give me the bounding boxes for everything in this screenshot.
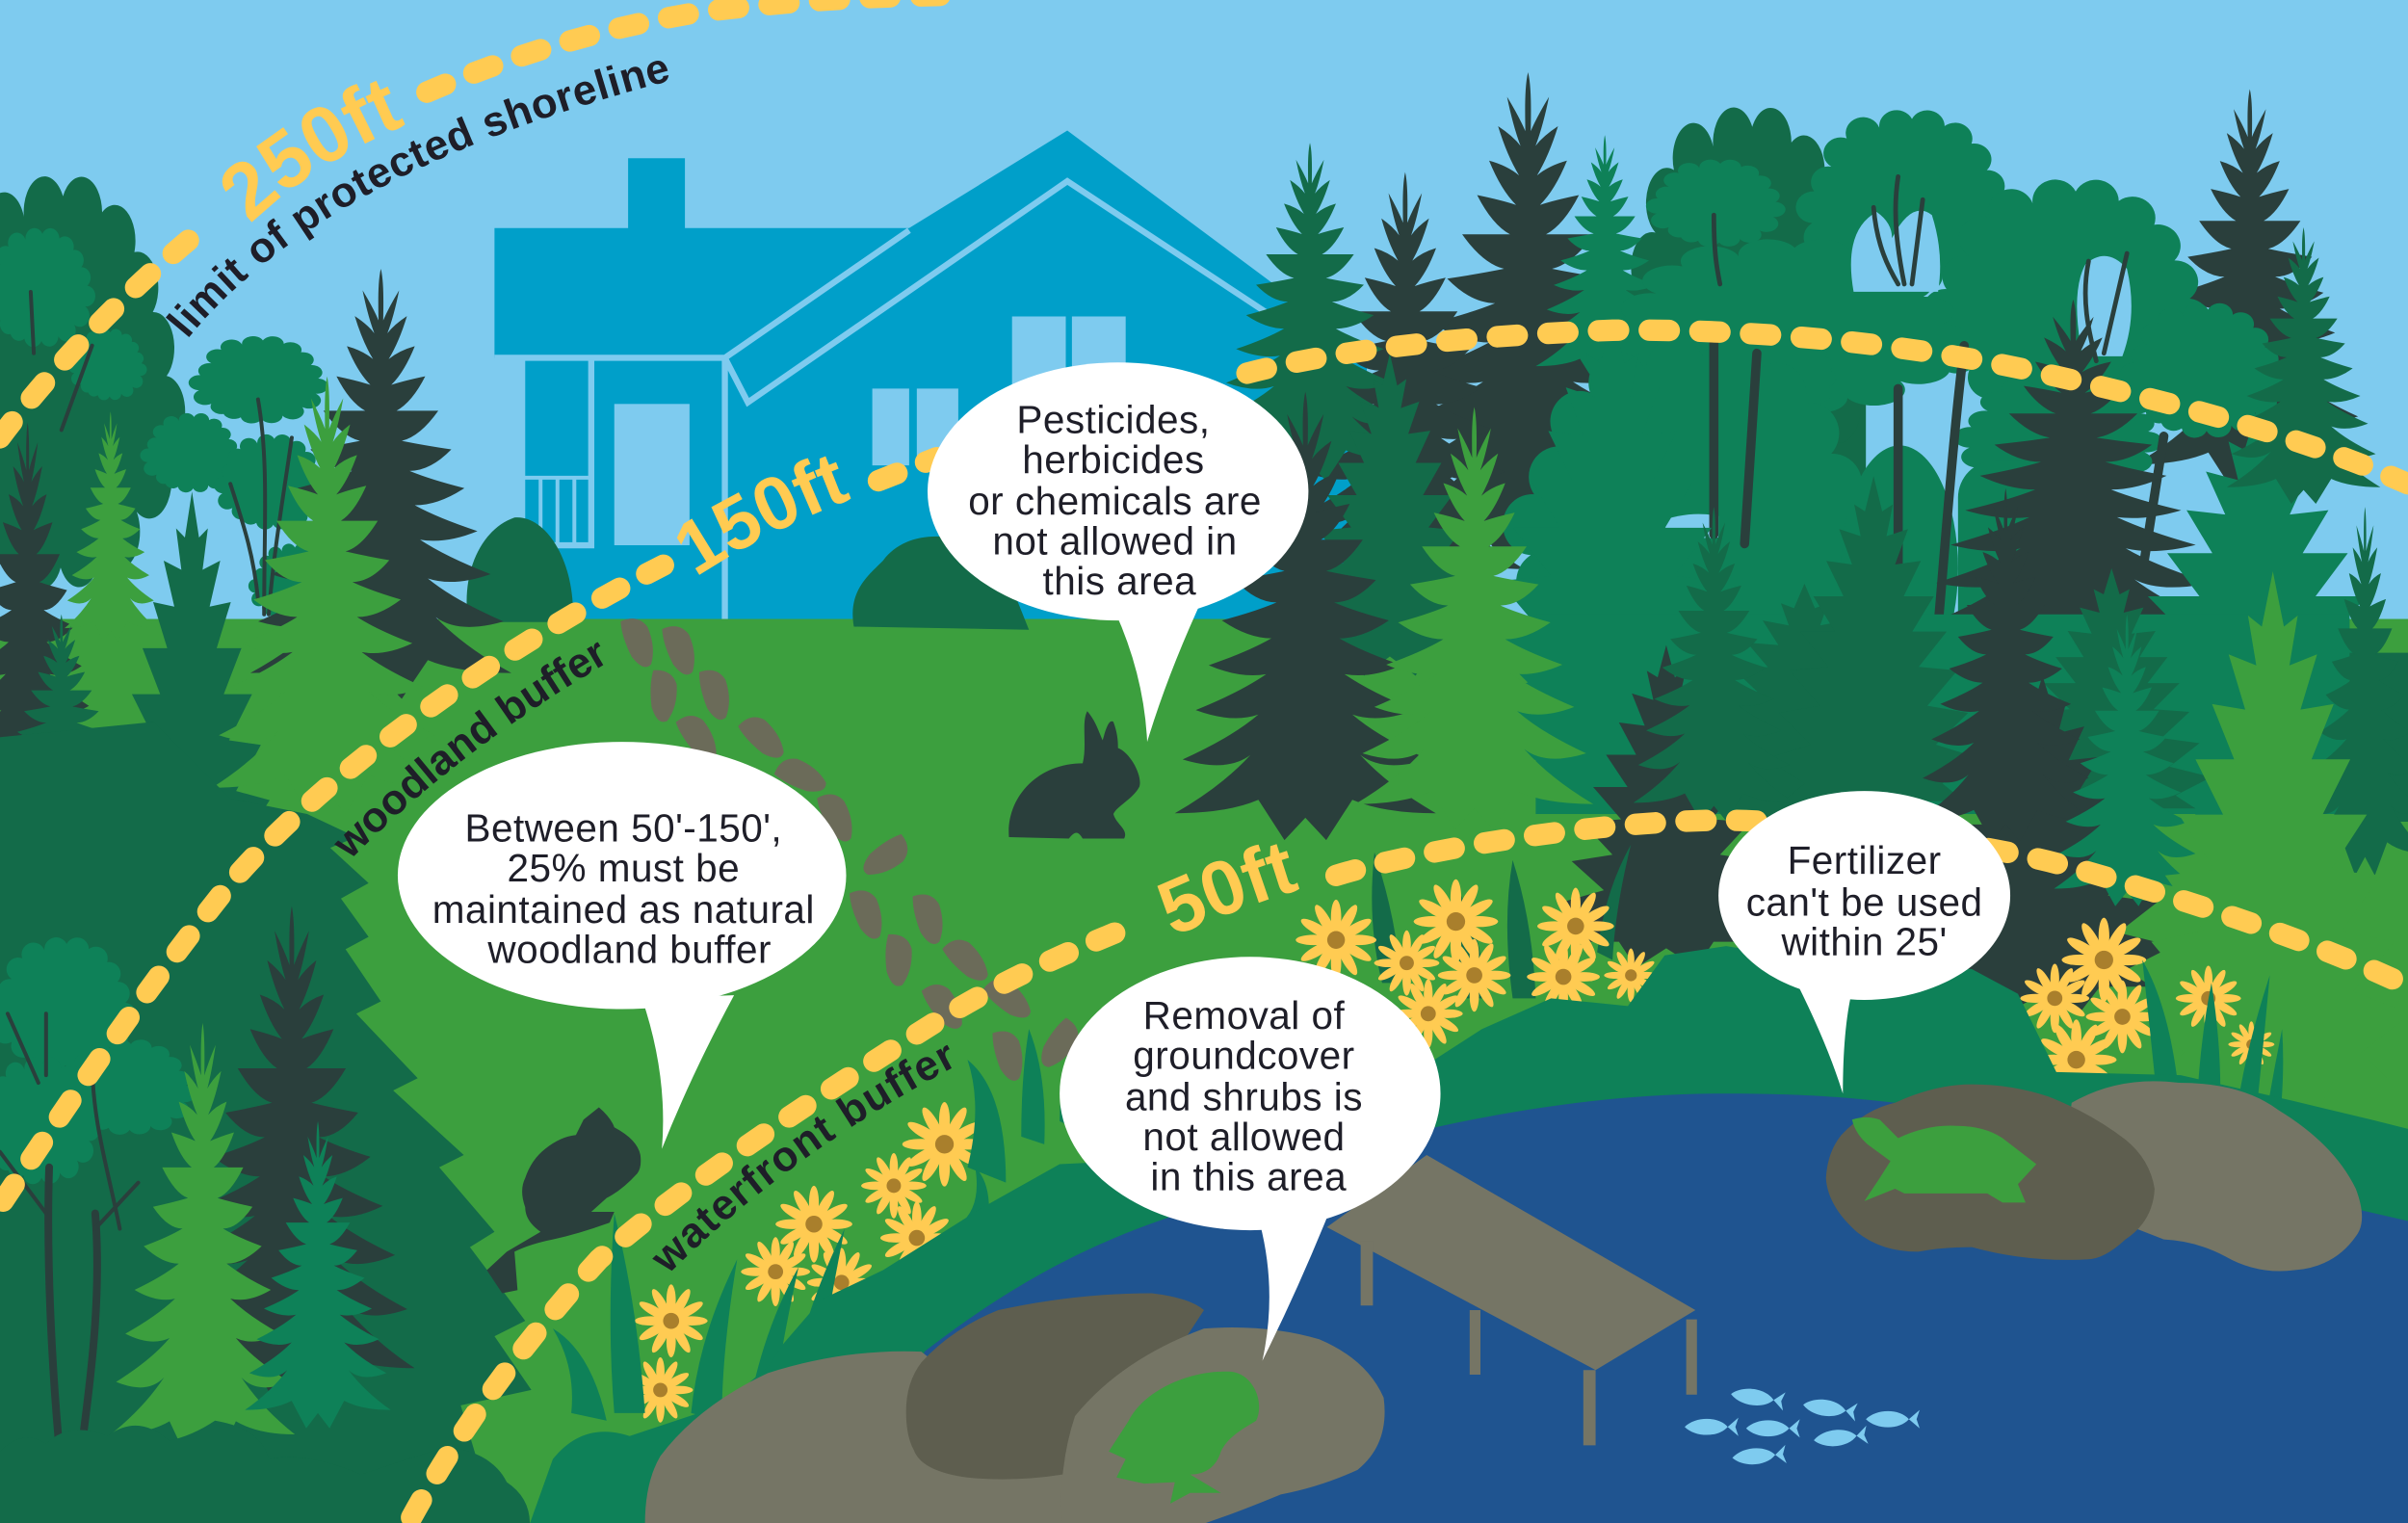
dock [1327, 1155, 1697, 1445]
callout: groundcover removal: in this area [1150, 1155, 1347, 1199]
rocks: left [645, 1293, 1385, 1523]
callout: groundcover removal: groundcover [1133, 1034, 1355, 1078]
fish school [1685, 1385, 1920, 1467]
50ft boundary line [411, 820, 2408, 1517]
forest: right back layer [1210, 72, 2408, 837]
callout: fertilizer: within 25' [1780, 920, 1948, 964]
rocks: right [1826, 1081, 2362, 1272]
250ft boundary line [0, 0, 940, 437]
tree trunks [1714, 176, 2127, 361]
callout: groundcover removal: not allowed [1142, 1115, 1345, 1159]
door [615, 404, 690, 545]
window upper [1012, 316, 1126, 414]
callout: fertilizer: Fertilizer [1788, 838, 1942, 882]
callout: woodland buffer rule: woodland buffer [486, 928, 772, 972]
flowers and reeds: left cluster [553, 1029, 1079, 1423]
turtle on rock [1852, 1117, 2036, 1202]
150ft boundary line [3, 330, 2408, 1201]
mid-green canopy mass [1503, 339, 1877, 688]
label: waterfront buffer: waterfront buffer [652, 1044, 952, 1272]
callout: woodland buffer rule: Between 50'-150', [464, 806, 782, 851]
frog on rock [1109, 1372, 1259, 1504]
squirrel silhouette [486, 1108, 641, 1293]
label: woodland buffer: woodland buffer [334, 642, 603, 856]
sky notches under crowns [1851, 211, 2132, 356]
callout: woodland buffer rule: 25% must be [508, 846, 740, 890]
callout: pesticides: this area [1043, 559, 1196, 603]
waterfront bank [530, 946, 2408, 1523]
house [494, 131, 1367, 622]
callout: pesticides: Pesticides, [1016, 398, 1210, 442]
rabbit silhouette [1008, 711, 1140, 839]
callout: groundcover removal: and shrubs is [1125, 1075, 1363, 1119]
flowers and reeds: upper cluster [1296, 845, 1658, 1048]
label: 150ft: 150ft [676, 457, 851, 575]
shrubs beside house [466, 517, 1029, 630]
callout: woodland buffer rule: maintained as natural [432, 887, 815, 932]
callout: pesticides: herbicides [1022, 437, 1205, 482]
label: limit of protected shoreline: limit of protected shoreline [166, 61, 668, 337]
callout: woodland buffer rule [398, 742, 847, 1149]
forest: left back layer [0, 176, 511, 953]
callout: pesticides [928, 362, 1308, 742]
bottom-left dark shrubs [0, 1421, 530, 1523]
callout: groundcover removal: Removal of [1143, 993, 1345, 1037]
window lower [873, 388, 958, 465]
callout: fertilizer: can't be used [1746, 880, 1982, 924]
callout: fertilizer [1718, 791, 2010, 1093]
callout: groundcover removal [1060, 957, 1441, 1361]
forest: left front layer [0, 722, 532, 1498]
stepping stone path [619, 615, 1086, 1083]
callout: pesticides: not allowed in [992, 519, 1238, 564]
label: 50ft: 50ft [1158, 844, 1299, 932]
pond water [860, 1093, 2408, 1523]
forest: right front layer [1175, 392, 2408, 1124]
callout: pesticides: or chemicals are [968, 479, 1262, 523]
porch railing [522, 478, 591, 545]
label: 250ft: 250ft [222, 81, 405, 223]
lawn [0, 619, 2408, 1523]
flowers and reeds: right cluster [2020, 918, 2283, 1129]
